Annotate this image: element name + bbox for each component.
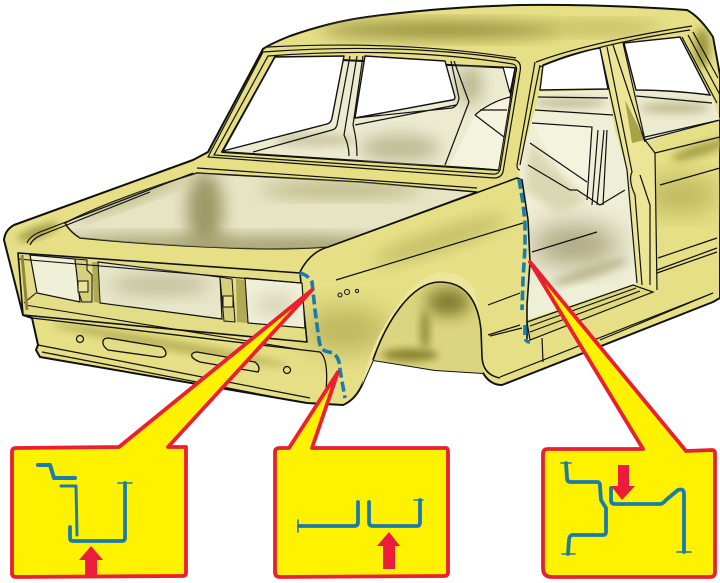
red arrow 1 (79, 546, 103, 576)
fender crease and vent holes (336, 223, 523, 297)
red arrow 2 (377, 532, 400, 569)
wheel arch interior (373, 282, 500, 378)
callout 1: section through radiator panel joint (12, 290, 312, 577)
wheel arch flare (362, 272, 483, 385)
A pillar lines (517, 62, 540, 170)
windshield frame lines (208, 45, 520, 178)
body shading (16, 22, 720, 371)
pillar lines (253, 56, 459, 156)
middle grille opening (98, 262, 222, 319)
section profile 2 (298, 500, 423, 532)
left grille opening (30, 255, 80, 302)
radiator panel (18, 253, 307, 350)
callout 2: section through lower wing joint (275, 372, 448, 577)
blue joint line: front wing front edge (300, 273, 345, 398)
lower rear panel lines (488, 293, 713, 377)
engine bay (27, 168, 477, 255)
B pillar (600, 43, 657, 290)
front holes (76, 336, 84, 342)
fender edge (300, 178, 530, 340)
rear side window and interior below (624, 37, 720, 142)
front slot right (192, 352, 259, 372)
body silhouette (4, 5, 720, 405)
red arrow 3 (611, 465, 635, 500)
section profile 1 (38, 465, 132, 541)
left bracket (75, 259, 92, 302)
door sill (527, 285, 653, 340)
right bracket (220, 277, 235, 322)
panel inner lines (18, 259, 303, 350)
front slot left (103, 338, 166, 357)
right grille opening (245, 278, 305, 328)
windshield opening (222, 56, 515, 170)
callout box 3 (530, 262, 715, 577)
side windows seen through windshield (223, 56, 344, 151)
blue joint line: front wing rear edge (519, 179, 530, 342)
interior seat lines (528, 97, 625, 252)
callout box 1 (12, 290, 312, 577)
lower front panel details (32, 318, 327, 402)
side window (540, 48, 608, 90)
door opening interior (518, 90, 637, 320)
rear body lines (600, 32, 720, 340)
callout box 2 (275, 372, 448, 577)
section profile 3 (561, 463, 691, 554)
callout 3: section through door pillar joint (530, 262, 715, 577)
